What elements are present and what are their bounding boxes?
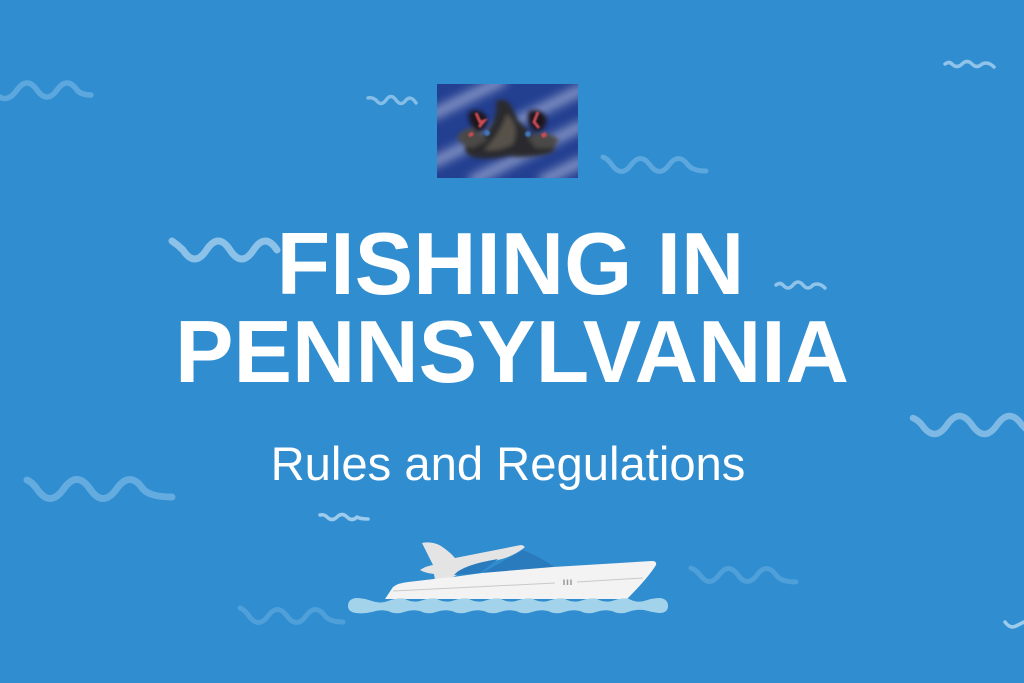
hull vents [564,580,571,585]
coat of arms [457,100,559,159]
side window [454,559,498,575]
title: FISHING IN [277,215,744,313]
wave: small near flag [368,96,416,104]
wave: top right [945,62,994,67]
hull [385,561,656,599]
yacht fin and arch [420,542,525,580]
wave: bottom left [240,608,343,622]
wave: behind title [172,241,277,259]
hull stripe [393,578,643,591]
wave: top left [0,83,91,99]
wave: right of boat [691,568,796,582]
icon: Pennsylvania flag [437,84,578,178]
icon: white motor yacht on water [348,542,668,613]
wave: lower left [27,480,172,498]
wave: bottom right [1005,622,1024,627]
wave: right of title [776,282,825,288]
arms red details [470,112,545,137]
windshield [482,550,555,573]
water under yacht [348,598,668,613]
flag field [437,84,578,178]
subtitle: Rules and Regulations [271,438,745,491]
title line 2: PENNSYLVANIA [175,303,849,401]
wave: small lower left [320,514,368,520]
wave: right of flag [603,157,706,172]
wave: far right [913,416,1024,434]
flag sheen stripes [437,84,578,178]
